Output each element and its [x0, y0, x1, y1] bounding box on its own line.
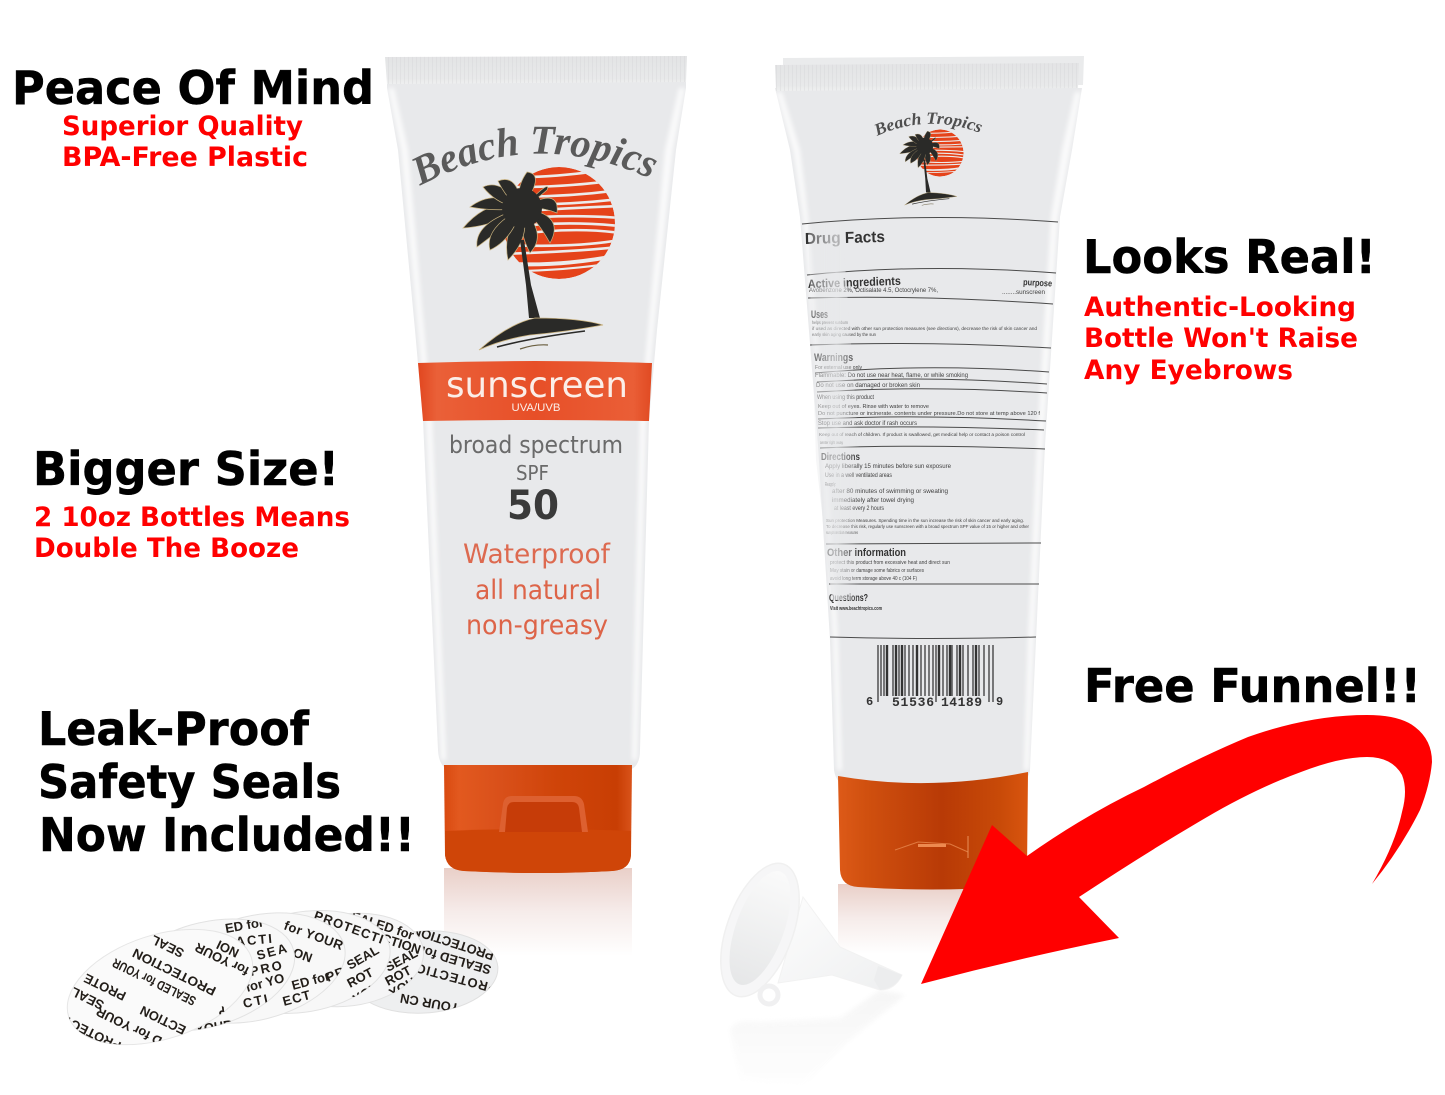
seal 5: PROTECTION	[337, 917, 423, 957]
section: uses: early skin aging caused by the sun	[812, 332, 876, 337]
seal 5: SEAL	[382, 945, 420, 975]
seal 1 (front): PROTECTION	[40, 1003, 123, 1054]
seal 4: YOU	[350, 980, 382, 1007]
seal 1 (front)	[66, 929, 254, 1045]
seal 2: PRO	[249, 957, 285, 979]
section: warnings: Do not use on damaged or broken skin	[816, 383, 920, 389]
label rules	[802, 217, 1058, 639]
seal 6 (rear)	[370, 930, 498, 1014]
seal 6 (rear): PROTECTION	[403, 957, 499, 997]
subtext: Double The Booze	[34, 533, 299, 564]
section: warnings: Stop use and ask doctor if rash occurs	[818, 421, 917, 427]
section: other information: avoid long term storage above 40 c (104 F)	[830, 576, 917, 582]
subtext: 2 10oz Bottles Means	[34, 502, 350, 533]
heading: Looks Real!	[1083, 230, 1376, 284]
logo art: palm tree and striped sun	[463, 167, 620, 350]
section: uses: helps prevent sunburn	[812, 320, 849, 325]
panel: back sunscreen bottle	[775, 56, 1084, 940]
seal 3: for YOUR	[282, 918, 346, 953]
funnel spout tip	[874, 966, 902, 990]
back bottle edge sheen	[776, 92, 1081, 770]
section: directions: To decrease this risk, regularly use sunscreen with a broad spectrum SPF value of 15 or higher and other	[826, 524, 1029, 529]
section: warnings: Warnings	[814, 352, 853, 364]
seal 4: SEAL	[344, 942, 382, 973]
panel: funnel	[705, 853, 905, 1090]
funnel cone and spout	[778, 897, 902, 990]
seal 6 (rear): YOUR CN	[399, 991, 461, 1016]
seal 1 (front): R	[216, 1003, 231, 1021]
funnel hanging tab	[760, 986, 778, 1004]
subtext: Superior Quality	[62, 111, 303, 142]
front bottle crimp seal	[385, 56, 687, 84]
subtext	[62, 111, 308, 173]
label glare	[808, 225, 860, 600]
arrow: red curved arrow to funnel	[921, 715, 1432, 984]
barcode: 6	[866, 695, 873, 709]
callout: Leak-Proof Safety Seals: Now Included!!	[39, 808, 415, 862]
back bottle crimp seal	[775, 56, 1084, 91]
palm trunk	[520, 240, 540, 318]
panel: safety seals	[66, 910, 498, 1045]
seal 2: for YO	[244, 970, 286, 995]
seal 1 (front): PROTE	[81, 971, 128, 1004]
seal 3: ON	[291, 945, 314, 965]
label: broad spectrum: broad spectrum	[449, 431, 623, 459]
label: 50: 50	[507, 483, 559, 529]
section: warnings: Keep out of reach of children. If product is swallowed, get medical help or contact a poison control	[819, 432, 1025, 437]
seal 2: YOUR	[194, 1017, 234, 1037]
band text: sunscreen: sunscreen	[446, 365, 628, 406]
panel: front sunscreen bottle	[385, 56, 687, 938]
section: active ingredients	[808, 274, 1052, 296]
section: active ingredients: Avobenzone 2%, Octisalate 4.5, Octocrylene 7%,	[809, 288, 938, 294]
section: other information: protect this product from excessive heat and direct sun	[830, 560, 950, 566]
seal 1 (front): SEALED for YOUR	[110, 955, 198, 1009]
seal 2: SEA	[255, 940, 290, 963]
section: directions	[821, 451, 1029, 535]
label: all natural: all natural	[475, 575, 601, 606]
seal 1 (front): NOI	[214, 937, 241, 961]
seal 1 (front): ECTION	[138, 1003, 188, 1038]
seal 1 (front): PROTECTION	[130, 945, 218, 999]
callout: Peace Of Mind	[12, 61, 374, 173]
front bottle orange cap	[444, 765, 632, 873]
heading: Bigger Size!	[33, 442, 339, 496]
section: directions: Apply liberally 15 minutes before sun exposure	[825, 463, 952, 470]
section: directions: after 80 minutes of swimming or sweating	[832, 488, 949, 495]
sunscreen colour band	[418, 361, 652, 421]
seal 2	[175, 918, 295, 1030]
band text: UVA/UVB: UVA/UVB	[512, 402, 560, 414]
seal 4	[284, 910, 390, 1014]
callout: Bigger Size	[33, 442, 350, 564]
section: warnings: center right away	[820, 440, 844, 445]
seal 1 (front): for YOUR	[192, 939, 251, 979]
section: active ingredients: Active ingredients	[808, 274, 901, 291]
section: warnings: Do not puncture or incinerate. contents under pressure.Do not store at temp above 120 f	[818, 411, 1041, 417]
seal 1 (front): SEAL	[149, 932, 186, 961]
section: active ingredients: ........sunscreen	[1002, 290, 1045, 296]
seal 5: YOU	[386, 974, 418, 1001]
subtext: Bottle Won't Raise	[1084, 323, 1358, 354]
section: other information: May stain or damage some fabrics or surfaces	[830, 568, 924, 574]
back bottle reflection	[838, 884, 1028, 954]
section: other information	[827, 547, 950, 582]
section: questions	[829, 593, 882, 612]
section: directions: immediately after towel drying	[832, 497, 915, 504]
seal 2: ED for	[224, 914, 265, 936]
callout: Free Funnel: Free Funnel!!	[1084, 659, 1421, 713]
section: directions: Directions	[821, 451, 860, 463]
callout: Leak-Proof Safety Seals	[38, 702, 415, 862]
seal 3: PROT	[324, 956, 366, 985]
seal 4: PROTECTI	[312, 908, 386, 947]
seal 2: ACTI	[235, 931, 274, 949]
heading: Drug Facts: Drug Facts	[805, 229, 885, 248]
back bottle orange cap	[838, 772, 1028, 890]
callout: Looks Real	[1083, 230, 1376, 386]
funnel reflection	[730, 990, 905, 1090]
seal 6 (rear): PROTECTION	[410, 923, 496, 963]
section: directions: Reapply:	[825, 482, 836, 488]
subtext	[1084, 292, 1358, 386]
section: warnings: Flammable: Do not use near heat, flame, or while smoking	[815, 373, 968, 379]
section: directions: Use in a well ventilated areas	[825, 472, 892, 479]
section: questions: Questions?	[829, 593, 868, 604]
seal 1 (front): D for YOUR	[93, 1004, 164, 1049]
sun	[495, 167, 620, 279]
section: uses: Uses	[811, 309, 828, 321]
seal 5: SEALED for	[341, 906, 416, 943]
island	[479, 318, 603, 350]
section: active ingredients: purpose	[1023, 277, 1052, 289]
section: warnings	[814, 352, 1041, 445]
seal 4: ROT	[344, 964, 376, 991]
seal 3: ECT	[281, 987, 313, 1009]
section: questions: Visit www.beachtropics.com	[830, 606, 882, 612]
barcode	[866, 645, 1003, 710]
back logo art	[898, 128, 966, 207]
section: warnings: For external use only	[815, 365, 862, 371]
seal 6 (rear): SEALED for	[418, 943, 493, 978]
section: directions: Sun protection Measures. Spending time in the sun increase the risk of skin cancer and early aging.	[826, 518, 1024, 523]
subtext: Any Eyebrows	[1084, 355, 1293, 386]
back logo text: Beach Tropics	[874, 112, 982, 136]
barcode: 9	[996, 695, 1003, 709]
logo text: Beach Tropics: Beach Tropics	[412, 126, 657, 186]
subtext	[34, 502, 350, 564]
callout: Leak-Proof Safety Seals: Leak-Proof	[38, 702, 310, 756]
subtext: Authentic-Looking	[1084, 292, 1356, 323]
subtext: BPA-Free Plastic	[62, 142, 308, 173]
seal 3: ED for	[290, 968, 331, 993]
front bottle reflection	[444, 868, 632, 956]
barcode: 51536	[892, 695, 934, 710]
seal 2: CTI	[242, 991, 271, 1011]
section: warnings: Keep out of eyes. Rinse with water to remove	[818, 404, 929, 410]
back bottle body	[775, 88, 1082, 786]
section: directions: at least every 2 hours	[834, 505, 884, 512]
funnel rim	[705, 853, 815, 1007]
label: non-greasy: non-greasy	[466, 610, 608, 641]
seal 1 (front): SEALE	[60, 980, 106, 1013]
front bottle body	[387, 78, 686, 770]
label: SPF: SPF	[516, 461, 549, 485]
drug facts label	[802, 217, 1058, 639]
seal 5: ROT	[382, 962, 414, 989]
seal 5	[332, 912, 424, 1008]
section: uses: if used as directed with other sun protection measures (see directions), decrease the risk of skin cancer and	[812, 326, 1038, 331]
section: uses	[811, 309, 1038, 337]
section: other information: Other information	[827, 547, 906, 559]
section: warnings: When using this product	[817, 395, 874, 401]
section: directions: sun protection measures	[826, 530, 858, 535]
label: Waterproof: Waterproof	[463, 539, 611, 570]
seal 3	[226, 912, 346, 1024]
front bottle edge sheen	[388, 88, 685, 760]
palm fronds	[463, 172, 557, 260]
callout: Leak-Proof Safety Seals: Safety Seals	[38, 755, 341, 809]
heading: Peace Of Mind	[12, 61, 374, 115]
barcode: 14189	[941, 695, 982, 710]
